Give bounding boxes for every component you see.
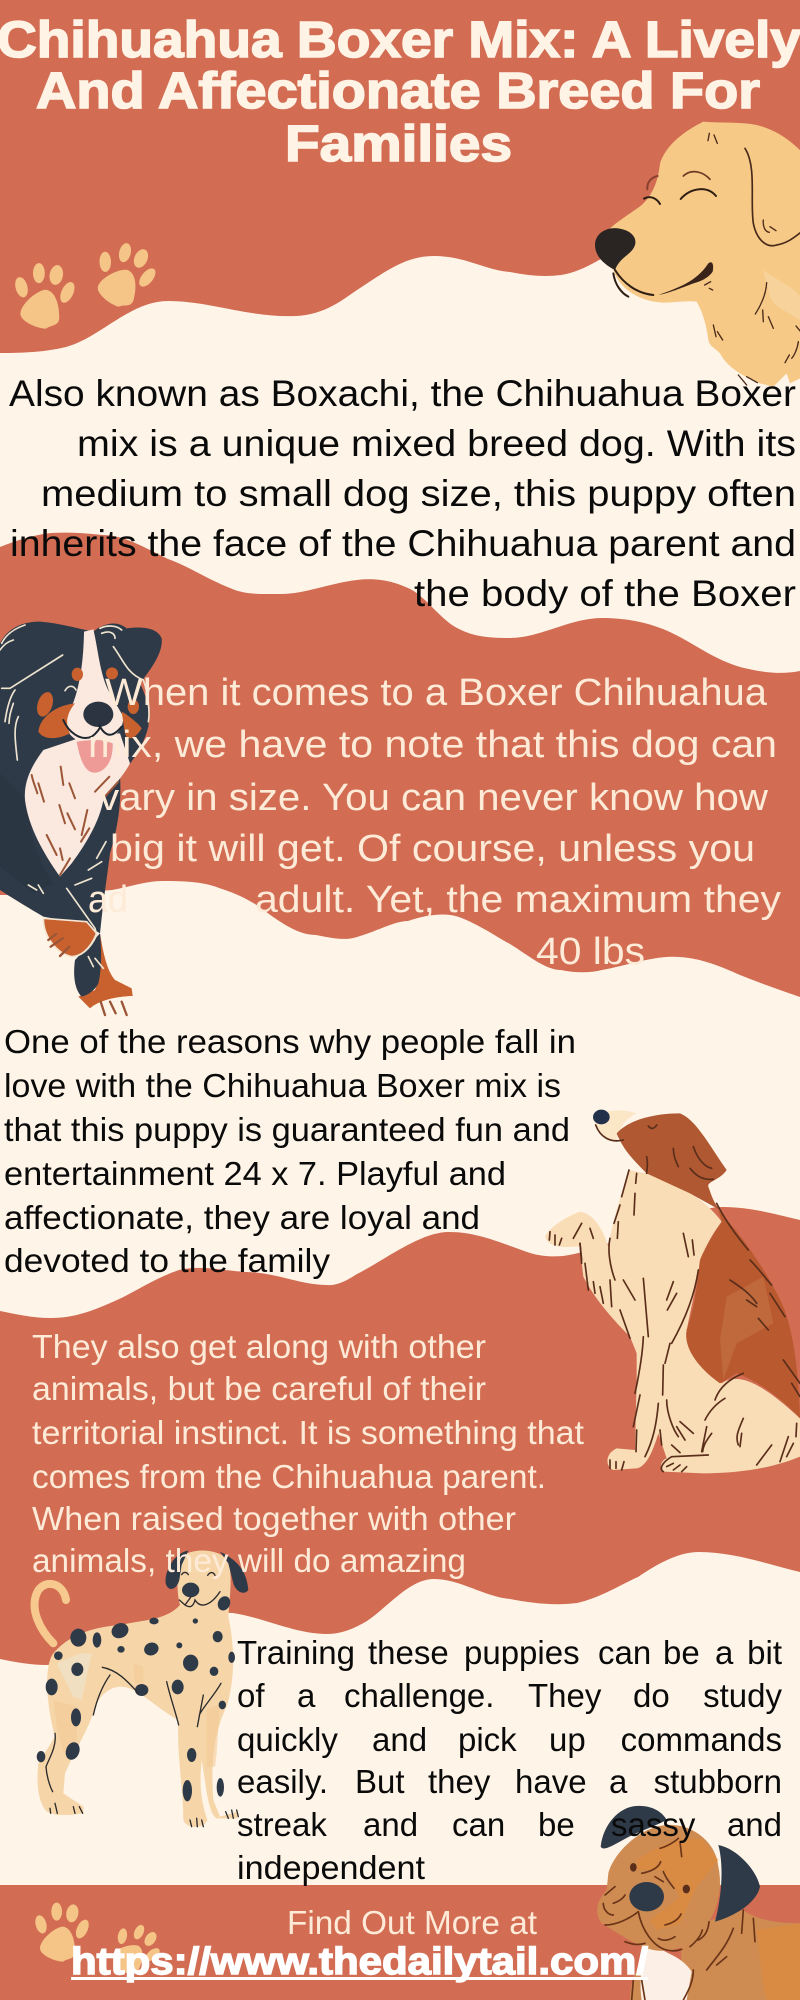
text block: training paragraph: these <box>368 1634 449 1671</box>
text block: training paragraph: and <box>372 1721 427 1758</box>
icon: footer paw left <box>33 1903 91 1962</box>
text block: size paragraph: vary in size. You can never know how <box>99 777 769 819</box>
footer call to action text: Find Out More at <box>287 1904 537 1941</box>
icon: Bernese mountain dog <box>0 622 162 1018</box>
footer panel <box>0 1885 800 2000</box>
text block: size paragraph <box>88 672 781 973</box>
text block: training paragraph: quickly <box>237 1721 338 1758</box>
text block: training paragraph: They <box>528 1677 602 1714</box>
text block: other animals paragraph: territorial instinct. It is something that <box>32 1414 584 1451</box>
text block: training paragraph: can <box>598 1634 651 1671</box>
icon: footer paw right <box>103 1917 169 1983</box>
text block: training paragraph: a <box>715 1634 734 1671</box>
text block: training paragraph: Training <box>237 1634 355 1671</box>
text block: temperament paragraph: entertainment 24 x 7. Playful and <box>4 1155 506 1192</box>
text block: training paragraph: a <box>297 1677 316 1714</box>
text block: training paragraph: independent <box>237 1849 425 1886</box>
text block: training paragraph: commands <box>621 1721 782 1758</box>
text block: size paragraph: adult. Yet, the maximum they <box>255 879 781 921</box>
icon: paw left <box>13 263 77 329</box>
text block: training paragraph: sassy <box>611 1806 696 1843</box>
text block: training paragraph: do <box>633 1677 670 1714</box>
text block: training paragraph: can <box>452 1806 505 1843</box>
text block: size paragraph: ad <box>88 879 128 921</box>
text block: training paragraph: bit <box>747 1634 782 1671</box>
text block: training paragraph: and <box>727 1806 782 1843</box>
panel: cream wave band 3 <box>0 1552 800 1885</box>
icon: paw right <box>88 237 164 314</box>
text block: other animals paragraph: animals, but be careful of their <box>32 1370 486 1407</box>
text block: intro paragraph: the body of the Boxer <box>414 573 796 614</box>
footer link with underline: https://www.thedailytail.com/ <box>71 1941 648 1983</box>
text block: training paragraph: challenge. <box>344 1677 494 1714</box>
text block: size paragraph: mix, we have to note that this dog can <box>88 724 777 766</box>
text block: other animals paragraph: When raised together with other <box>32 1500 516 1537</box>
title <box>0 11 800 172</box>
text block: training paragraph: stubborn <box>654 1763 782 1800</box>
title: Families <box>285 115 512 172</box>
icon: brown and cream sitting dog <box>545 1110 800 1473</box>
text block: training paragraph: be <box>663 1634 700 1671</box>
text block: temperament paragraph: that this puppy is guaranteed fun and <box>4 1111 570 1148</box>
text block: training paragraph: pick <box>458 1721 517 1758</box>
text block: training paragraph: up <box>549 1721 586 1758</box>
panel: cream wave band 2 <box>0 881 800 1318</box>
text block: other animals paragraph: animals, they will do amazing <box>32 1542 466 1579</box>
text block: other animals paragraph: comes from the Chihuahua parent. <box>32 1458 546 1495</box>
text block: temperament paragraph <box>4 1023 576 1279</box>
text block: training paragraph: study <box>703 1677 782 1714</box>
text block: size paragraph: 40 lbs <box>536 931 645 973</box>
text block: training paragraph <box>237 1634 782 1886</box>
text block: temperament paragraph: devoted to the family <box>4 1242 331 1279</box>
text block: training paragraph: puppies <box>464 1634 580 1671</box>
text block: training paragraph: easily. <box>237 1763 328 1800</box>
text block: other animals paragraph <box>32 1328 584 1579</box>
icon: footer paw prints <box>33 1903 169 1983</box>
title: Chihuahua Boxer Mix: A Lively <box>0 11 800 68</box>
text block: intro paragraph <box>9 373 796 614</box>
text block: training paragraph: a <box>609 1763 628 1800</box>
text block: training paragraph: be <box>538 1806 575 1843</box>
text block: other animals paragraph: They also get along with other <box>32 1328 486 1365</box>
text block: training paragraph: But <box>355 1763 405 1800</box>
text block: training paragraph: have <box>515 1763 587 1800</box>
text block: intro paragraph: inherits the face of the Chihuahua parent and <box>10 523 796 564</box>
text block: intro paragraph: medium to small dog size, this puppy often <box>41 473 796 514</box>
title: And Affectionate Breed For <box>36 62 760 119</box>
panel: cream wave band 1 <box>0 250 800 673</box>
icon: golden dog head <box>595 122 800 387</box>
text block: intro paragraph: mix is a unique mixed breed dog. With its <box>77 423 796 464</box>
icon: dalmatian dog <box>35 1551 248 1827</box>
text block: temperament paragraph: One of the reasons why people fall in <box>4 1023 576 1060</box>
text block: size paragraph: big it will get. Of course, unless you <box>110 828 755 870</box>
text block: training paragraph: of <box>237 1677 265 1714</box>
text block: training paragraph: they <box>428 1763 491 1800</box>
text block: training paragraph: and <box>363 1806 418 1843</box>
text block: temperament paragraph: affectionate, they are loyal and <box>4 1199 480 1236</box>
text block: temperament paragraph: love with the Chihuahua Boxer mix is <box>4 1067 561 1104</box>
text block: intro paragraph: Also known as Boxachi, the Chihuahua Boxer <box>9 373 796 414</box>
text block: size paragraph: When it comes to a Boxer Chihuahua <box>105 672 768 714</box>
icon: top paw prints <box>13 237 164 329</box>
icon: boxer dog <box>597 1806 800 2000</box>
text block: training paragraph: streak <box>237 1806 327 1843</box>
